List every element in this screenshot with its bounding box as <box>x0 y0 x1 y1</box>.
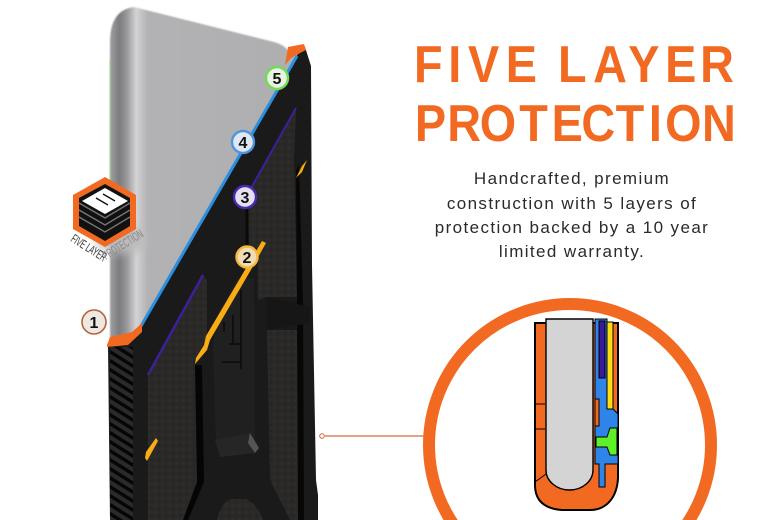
green edge <box>109 60 111 180</box>
title: FIVELAYER <box>414 36 734 94</box>
orange inset <box>595 399 599 426</box>
clip tab corner <box>248 433 259 453</box>
description text: construction with 5 layers of <box>447 194 697 213</box>
description text: limited warranty. <box>499 242 645 261</box>
badge 1: 1 <box>90 315 99 332</box>
purple layer line upper <box>250 108 296 190</box>
lower left leather panel <box>148 275 207 520</box>
yellow layer line <box>195 241 266 364</box>
callout leader line <box>320 434 436 438</box>
phone group <box>107 7 318 520</box>
blue layer <box>595 319 618 487</box>
orange bottom bumper <box>107 323 142 347</box>
shell joints <box>535 404 546 482</box>
purple layer <box>599 321 605 378</box>
bottom arch <box>217 499 263 520</box>
ribbed side grip <box>110 347 133 520</box>
silver phone body <box>110 7 297 340</box>
badge 5: 5 <box>273 71 282 88</box>
vertical dark line under badge 3 <box>246 205 248 250</box>
clip tab <box>215 433 259 457</box>
badge 4 <box>232 131 254 153</box>
orange shell <box>535 323 618 510</box>
badge 2: 2 <box>243 250 252 267</box>
clip slots <box>222 290 241 369</box>
orange top bumper <box>285 44 306 65</box>
black divider line at yellow <box>183 365 204 520</box>
white top layer <box>82 188 128 214</box>
yellow accent left <box>145 438 158 461</box>
description text: protection backed by a 10 year <box>435 218 709 237</box>
icon shadow <box>96 227 148 253</box>
purple layer line lower <box>148 275 203 375</box>
badge 1 <box>82 310 106 334</box>
badge 3: 3 <box>241 190 250 207</box>
badge 3 <box>234 186 256 208</box>
clip <box>213 278 255 445</box>
badge 5 <box>266 67 288 89</box>
icon label left: FIVE LAYER <box>68 233 108 265</box>
description text: Handcrafted, premium <box>474 169 670 188</box>
right strap <box>267 297 310 330</box>
hexagon <box>73 177 136 247</box>
blue layer line <box>137 56 297 333</box>
grey phone section <box>546 319 593 490</box>
cross-section diagram <box>535 319 618 510</box>
yellow accent right <box>296 160 307 178</box>
upper leather panel <box>247 108 297 300</box>
title <box>414 36 736 153</box>
badge 2 <box>236 246 258 268</box>
description text <box>435 169 709 261</box>
right dark rail <box>296 165 304 520</box>
green layer <box>596 428 617 455</box>
icon label right: PROTECTION <box>101 228 146 263</box>
badge 4: 4 <box>239 135 248 152</box>
title: PROTECTION <box>415 95 736 153</box>
icon: five layer hexagon badge <box>68 177 148 265</box>
black case <box>108 47 318 520</box>
lower right leather panel <box>267 330 300 520</box>
layers <box>79 203 130 232</box>
magnifier ring <box>429 304 711 520</box>
yellow layer <box>607 322 613 409</box>
